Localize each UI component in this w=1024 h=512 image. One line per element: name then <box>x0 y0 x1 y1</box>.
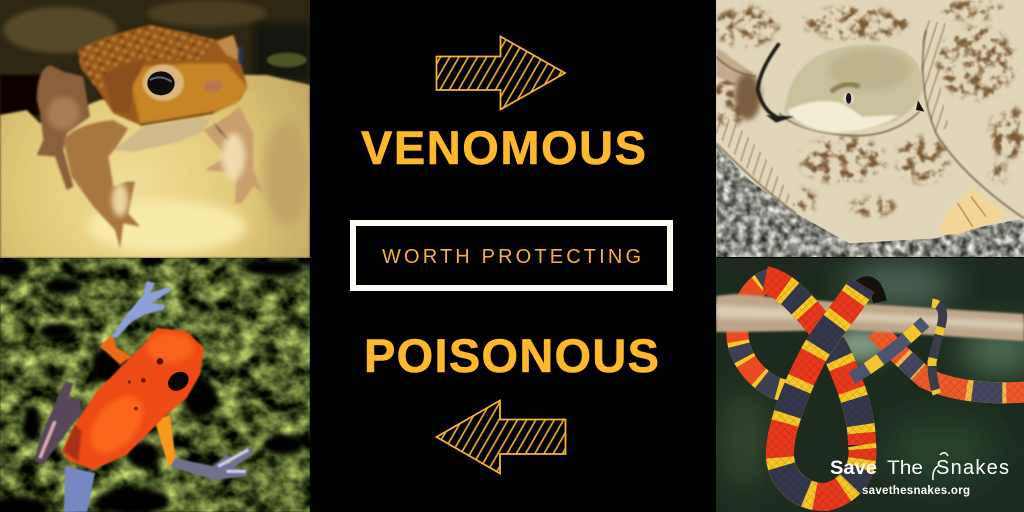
right arm <box>203 107 263 203</box>
frog right arm <box>155 415 177 468</box>
snake rear loop <box>737 280 790 392</box>
gravel rock <box>716 143 1024 258</box>
frog eye <box>168 372 189 391</box>
branch <box>716 294 1024 341</box>
logo: Save The Snakes <box>830 453 1009 497</box>
box: worth protecting <box>353 223 670 288</box>
label: worth protecting: WORTH PROTECTING <box>382 246 641 268</box>
rear leg <box>37 65 90 190</box>
logo: Save The Snakes: savethesnakes.org <box>862 485 970 497</box>
snake right body <box>876 330 1024 393</box>
ventral ribs <box>716 110 796 207</box>
snake head behind branch <box>858 283 880 302</box>
arrow: left to poisonous <box>436 400 566 474</box>
frog body <box>62 328 204 470</box>
toad eye <box>143 64 184 101</box>
frog rear thigh <box>35 381 82 465</box>
photo: red poison frog on moss <box>0 258 310 512</box>
frog lower leg <box>64 466 95 512</box>
heading: VENOMOUS: VENOMOUS <box>361 121 646 174</box>
photo: rattlesnake coiled on rock <box>716 0 1024 258</box>
photo: coral snake on branch <box>716 258 1024 512</box>
rattle <box>939 188 1006 235</box>
snake ascending body <box>780 285 863 497</box>
snake descending body <box>765 280 862 445</box>
head and back <box>78 25 247 125</box>
logo: Save The Snakes: Snakes <box>936 457 1009 479</box>
front leg <box>63 120 140 248</box>
belly <box>113 117 213 152</box>
logo: Save The Snakes: The <box>887 458 923 479</box>
logo: Save The Snakes: Save <box>830 458 877 479</box>
thin snake tail <box>932 303 943 394</box>
rattlesnake head <box>784 45 923 132</box>
blue tail section <box>852 322 925 378</box>
arrow: right to venomous <box>436 36 565 110</box>
photo: toad on rock <box>0 0 310 258</box>
heading: POISONOUS: POISONOUS <box>364 329 659 382</box>
frog left arm <box>100 335 132 365</box>
